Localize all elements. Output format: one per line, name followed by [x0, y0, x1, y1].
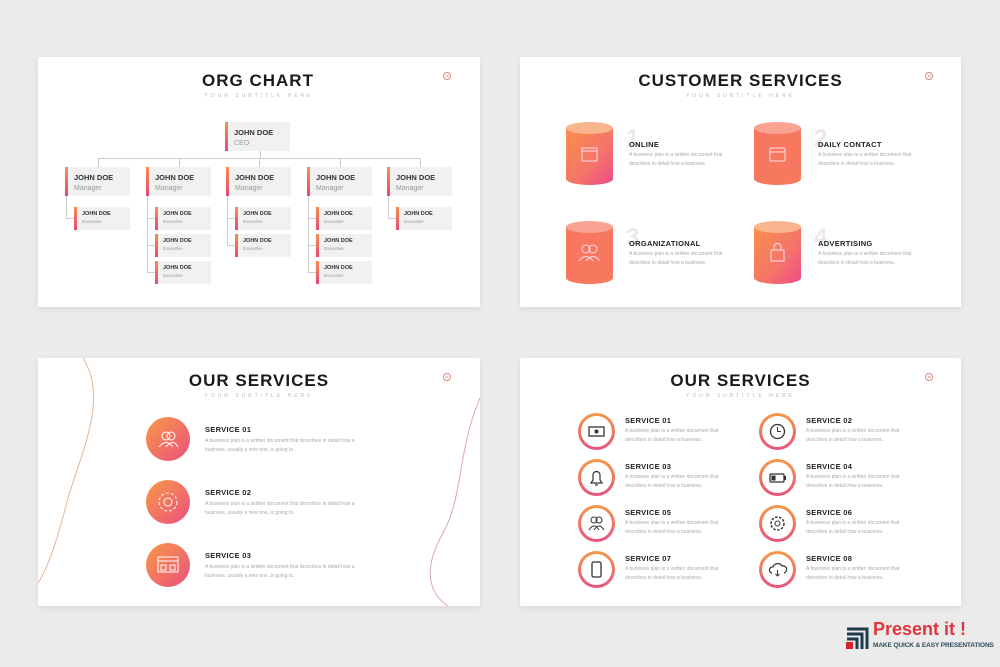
subtitle: YOUR SUBTITLE HERE [204, 93, 314, 99]
manager boxes: Executive [324, 246, 344, 251]
logo: present it: MAKE QUICK & EASY PRESENTATIONS [873, 642, 994, 649]
panel: our services (3 items) [38, 358, 480, 606]
manager boxes [65, 167, 452, 284]
manager boxes: Executive [404, 219, 424, 224]
page number: 25 [445, 74, 449, 78]
title: our services: OUR SERVICES [670, 371, 811, 390]
item: daily contact: DAILY CONTACT [818, 140, 882, 149]
manager boxes: JOHN DOE [324, 265, 353, 271]
manager boxes: Executive [324, 219, 344, 224]
manager boxes: JOHN DOE [396, 173, 435, 182]
manager boxes: JOHN DOE [235, 173, 274, 182]
panel: customer services [520, 57, 961, 307]
service 01 [146, 417, 355, 461]
item: advertising: ADVERTISING [818, 239, 873, 248]
manager boxes: JOHN DOE [243, 238, 272, 244]
title: org chart: ORG CHART [202, 71, 314, 90]
service 08: SERVICE 08 [806, 554, 852, 563]
service 02 [759, 413, 900, 450]
manager boxes: JOHN DOE [163, 238, 192, 244]
decorative curves [38, 358, 480, 606]
service 03: SERVICE 03 [205, 551, 251, 560]
page number [443, 373, 451, 381]
manager boxes: Executive [163, 219, 183, 224]
service 07 [578, 551, 718, 588]
title: our services: OUR SERVICES [189, 371, 329, 390]
service 04: A business plan is a written document that describes in detail how a business. [806, 474, 899, 489]
service 05: SERVICE 05 [625, 508, 671, 517]
manager boxes: Manager [155, 185, 183, 192]
executive boxes [74, 207, 130, 230]
services grid [578, 413, 900, 588]
item: daily contact: 2 [814, 125, 827, 152]
manager boxes: JOHN DOE [324, 238, 353, 244]
item: advertising: A business plan is a written document that describes in detail how a business. [818, 251, 911, 266]
service 06: SERVICE 06 [806, 508, 852, 517]
manager boxes: Executive [163, 273, 183, 278]
CEO box: CEO [234, 140, 249, 147]
service 04 [759, 459, 900, 496]
manager columns [98, 159, 421, 167]
service 07: A business plan is a written document that describes in detail how a business. [625, 566, 718, 581]
item: organizational: ORGANIZATIONAL [629, 239, 701, 248]
manager boxes: Executive [324, 273, 344, 278]
manager boxes: JOHN DOE [324, 211, 353, 217]
manager boxes: Manager [74, 185, 102, 192]
panel: our services (8 items) [520, 358, 961, 606]
manager boxes: JOHN DOE [155, 173, 194, 182]
item: organizational: 3 [626, 224, 639, 251]
service 02: A business plan is a written document that describes in detail how a business. [806, 428, 899, 443]
service 04: SERVICE 04 [806, 462, 852, 471]
logo: present it: Present it ! [873, 619, 966, 639]
service 02: SERVICE 02 [205, 488, 251, 497]
exec lines [66, 196, 67, 218]
manager boxes: JOHN DOE [243, 211, 272, 217]
service 06: A business plan is a written document that describes in detail how a business. [806, 520, 899, 535]
page number: 28 [927, 375, 931, 379]
subtitle: YOUR SUBTITLE HERE [686, 393, 795, 399]
item: online: ONLINE [629, 140, 659, 149]
service 02: A business plan is a written document that describes in detail how a business, usually a new one, is going to. [205, 501, 355, 516]
item: organizational [566, 221, 722, 284]
manager boxes: Executive [243, 219, 263, 224]
service 02 [146, 480, 355, 524]
service 01 [578, 413, 718, 450]
connector lines [98, 158, 421, 159]
service 08 [759, 551, 900, 588]
item: daily contact [754, 122, 912, 185]
item: daily contact: A business plan is a written document that describes in detail how a business. [818, 152, 911, 167]
manager boxes: Manager [396, 185, 424, 192]
service 03: A business plan is a written document that describes in detail how a business, usually a new one, is going to. [205, 564, 355, 579]
panel: org chart [38, 57, 480, 307]
service 07: SERVICE 07 [625, 554, 671, 563]
icon: logo mark [846, 628, 868, 649]
service 03: A business plan is a written document that describes in detail how a business. [625, 474, 718, 489]
executive boxes: Executive [82, 219, 102, 224]
manager boxes: JOHN DOE [404, 211, 433, 217]
executive boxes: JOHN DOE [82, 211, 111, 217]
logo: present it [846, 619, 994, 649]
title: customer services: CUSTOMER SERVICES [638, 71, 843, 90]
service 05: A business plan is a written document that describes in detail how a business. [625, 520, 718, 535]
service 01: A business plan is a written document that describes in detail how a business, usually a new one, is going to. [205, 438, 355, 453]
manager boxes: Executive [243, 246, 263, 251]
service 01: A business plan is a written document that describes in detail how a business. [625, 428, 718, 443]
manager boxes: JOHN DOE [74, 173, 113, 182]
item: online: A business plan is a written document that describes in detail how a business. [629, 152, 722, 167]
page number: 26 [927, 74, 931, 78]
manager boxes: JOHN DOE [163, 211, 192, 217]
page number [925, 373, 933, 381]
item: advertising: 4 [814, 224, 827, 251]
item: online: 1 [626, 125, 639, 152]
item: online [566, 122, 722, 185]
page number [443, 72, 451, 80]
manager boxes: JOHN DOE [163, 265, 192, 271]
service 06 [759, 505, 900, 542]
subtitle: YOUR SUBTITLE HERE [686, 93, 795, 99]
manager boxes: Executive [163, 246, 183, 251]
service 05 [578, 505, 718, 542]
page number [925, 72, 933, 80]
service 03 [578, 459, 718, 496]
service 02: SERVICE 02 [806, 416, 852, 425]
manager boxes: Manager [235, 185, 263, 192]
service 01: SERVICE 01 [205, 425, 251, 434]
manager boxes: JOHN DOE [316, 173, 355, 182]
service 03 [146, 543, 355, 587]
CEO box: JOHN DOE [234, 128, 273, 137]
page number: 27 [445, 375, 449, 379]
service 03: SERVICE 03 [625, 462, 671, 471]
manager boxes: Manager [316, 185, 344, 192]
service 08: A business plan is a written document that describes in detail how a business. [806, 566, 899, 581]
item: advertising [754, 221, 912, 284]
subtitle: YOUR SUBTITLE HERE [204, 393, 314, 399]
service 01: SERVICE 01 [625, 416, 671, 425]
item: organizational: A business plan is a written document that describes in detail how a business. [629, 251, 722, 266]
CEO box [225, 122, 290, 151]
